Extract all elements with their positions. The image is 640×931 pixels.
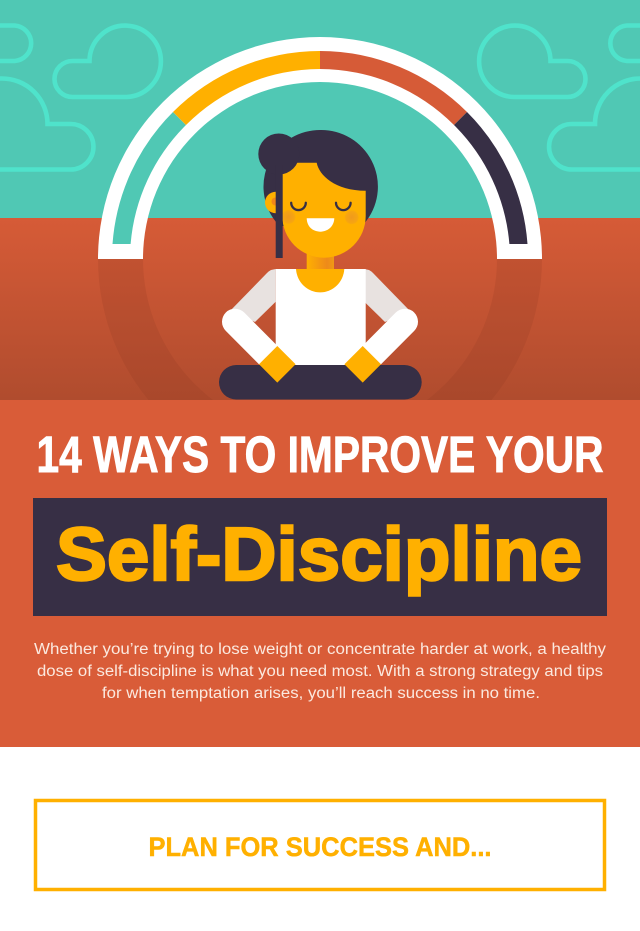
intro paragraph: Whether you’re trying to lose weight or concentrate harder at work, a healthy <box>34 641 606 658</box>
bun <box>258 134 299 174</box>
title banner <box>33 498 607 616</box>
neckline <box>296 269 344 292</box>
section box: PLAN FOR SUCCESS AND... <box>148 832 492 862</box>
section box <box>36 800 604 890</box>
ear <box>265 192 286 213</box>
closed eyes <box>291 203 351 210</box>
panel: title area <box>0 400 640 747</box>
gauge segment: orange <box>320 51 467 125</box>
title banner: Self-Discipline <box>56 512 582 596</box>
forearms <box>235 322 405 355</box>
gauge segment: yellow <box>173 51 320 125</box>
gauge arch <box>98 37 542 259</box>
arch shadow <box>98 259 542 370</box>
intro paragraph: for when temptation arises, you’ll reach success in no time. <box>102 685 540 702</box>
intro paragraph <box>34 641 606 702</box>
hands <box>259 346 381 383</box>
panel: sky <box>0 0 640 218</box>
crossed legs <box>219 365 422 400</box>
torso <box>276 269 366 365</box>
upper arms <box>230 269 410 322</box>
gauge segment: dark <box>454 112 528 244</box>
panel: ground <box>0 218 640 400</box>
gauge segment: teal <box>112 112 186 244</box>
face <box>282 163 366 258</box>
smile <box>307 218 334 232</box>
cheeks <box>282 210 359 224</box>
meditating character <box>219 130 422 400</box>
hair strand <box>276 165 283 258</box>
intro paragraph: dose of self-discipline is what you need most. With a strong strategy and tips <box>37 663 603 680</box>
clouds <box>0 26 640 170</box>
hair <box>263 130 378 226</box>
neck <box>307 250 334 270</box>
